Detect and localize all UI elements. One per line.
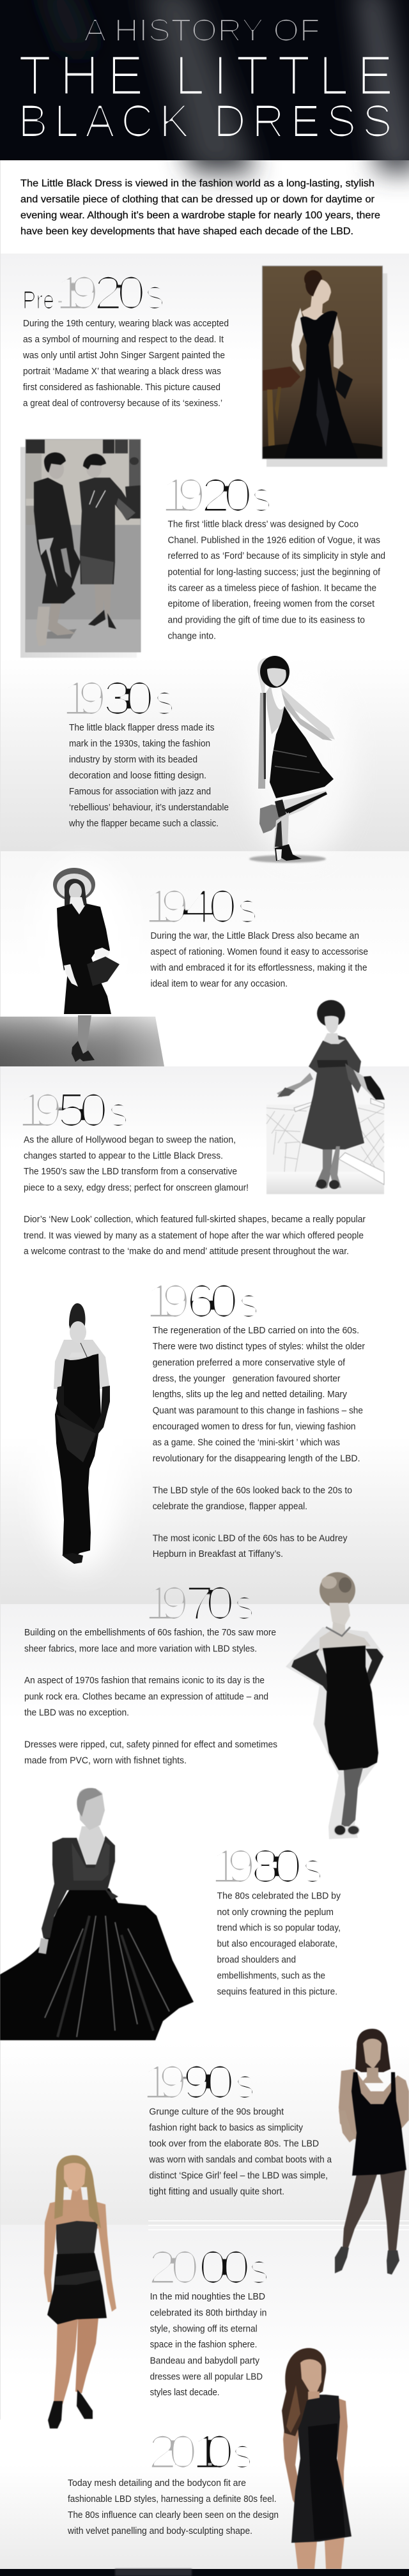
text: 1950s: As the allure of Hollywood began to sweep the nation, [24, 1135, 236, 1145]
text: 1920s [167, 519, 385, 641]
heading: Pre-1920s: s [144, 271, 166, 319]
image: Audrey Hepburn in long black dress [35, 1303, 125, 1571]
text: 1960s: celebrate the grandiose, flapper appeal. [153, 1501, 307, 1512]
panel: 1950s [17, 1000, 385, 1257]
text: 1940s: aspect of rationing. Women found it easy to accessorise [151, 947, 368, 957]
text: 1960s: The regeneration of the LBD carried on into the 60s. [153, 1326, 359, 1336]
title line: A History Of: A HISTORY OF [84, 13, 320, 48]
text: 1980s [217, 1891, 341, 1997]
text: 1990s [148, 2107, 332, 2197]
text: 1930s: ‘rebellious’ behaviour, it’s understandable [69, 803, 229, 813]
image: Madame X painting [262, 266, 387, 467]
text: 1970s: Building on the embellishments of 60s fashion, the 70s saw more [24, 1628, 276, 1638]
heading: 1980s: s [302, 1844, 323, 1892]
heading: 1940s [144, 880, 258, 933]
heading: 1970s: 70 [185, 1577, 235, 1630]
image: woman in 1950s dress on ship deck [266, 1000, 385, 1194]
text: 1980s: but also encouraged elaborate, [217, 1939, 337, 1950]
image: woman in 1940s suit and hat [35, 862, 131, 1062]
text: 2000s: styles last decade. [150, 2388, 220, 2398]
text: 1930s: why the flapper became such a classic. [68, 819, 219, 829]
heading: 1930s: s [154, 676, 175, 724]
heading: 2010s: 10 [192, 2425, 234, 2478]
heading: 2010s: 20 [148, 2425, 197, 2478]
image: woman in strapless black dress [44, 2155, 116, 2428]
text: 2000s: style, showing off its eternal [150, 2324, 258, 2335]
text: 2010s: with velvet panelling and body-sculpting shape. [67, 2526, 252, 2536]
text: 1960s: There were two distinct types of styles: whilst the older [153, 1342, 365, 1352]
text: pre-1920s: portrait ‘Madame X’ that wearing a black dress was [23, 367, 221, 377]
text: 1990s: fashion right back to basics as simplicity [149, 2123, 304, 2133]
text: 1920s: referred to as ‘Ford’ because of its simplicity in style and [167, 551, 385, 561]
text: pre-1920s: a great deal of controversy because of its ‘sexiness.’ [23, 398, 222, 409]
text: 1960s: encouraged women to dress for fun, viewing fashion [153, 1421, 355, 1432]
text: 2010s [67, 2478, 279, 2536]
heading: 2010s: s [232, 2430, 253, 2478]
text: 1950s: piece to a sexy, edgy dress; perfect for onscreen glamour! [24, 1183, 249, 1193]
heading: 1940s: s [237, 884, 258, 932]
image: woman in modern bodycon dress [282, 2348, 351, 2569]
text: 1920s: its career as a timeless piece of fashion. It became the [167, 584, 376, 594]
heading: 2000s: s [249, 2245, 270, 2293]
heading: 1950s: 19 [17, 1084, 63, 1137]
image: flapper dancer [246, 656, 355, 863]
text: 1960s: as a game. She coined the ‘mini-skirt ’ which was [153, 1437, 340, 1448]
image: woman in sequin and velvet gown [0, 1788, 194, 2040]
heading: 1950s: 50 [57, 1084, 108, 1137]
heading: 1960s [145, 1275, 259, 1328]
heading: Pre-1920s: 19 [55, 266, 99, 319]
heading: 1950s: s [108, 1088, 129, 1136]
heading: Pre-1920s [22, 266, 166, 319]
panel: 1940s [0, 862, 368, 1066]
heading: 1970s: s [234, 1581, 255, 1629]
heading: 1980s: 80 [251, 1840, 302, 1893]
text: 1920s: Chanel. Published in the 1926 edition of Vogue, it was [167, 535, 380, 545]
text: 1950s: changes started to appear to the Little Black Dress. [24, 1151, 223, 1161]
text: 1990s: was worn with sandals and combat boots with a [148, 2155, 332, 2165]
text: 1960s: Hepburn in Breakfast at Tiffany’s. [153, 1549, 283, 1559]
heading: 1970s: 19 [144, 1577, 189, 1630]
heading: 2000s: 00 [198, 2241, 251, 2294]
text: 1960s: The most iconic LBD of the 60s has to be Audrey [153, 1533, 348, 1543]
text: 1940s: During the war, the Little Black Dress also became an [151, 931, 359, 941]
text: pre-1920s: as a symbol of mourning and respect to the dead. It [23, 335, 224, 345]
text: 1930s: decoration and loose fitting design. [69, 771, 206, 781]
panel: 1920s [20, 439, 385, 658]
heading: 1940s: 19 [144, 880, 189, 933]
text: 1930s: industry by storm with its beaded [69, 755, 197, 765]
text: 1940s [150, 931, 368, 989]
text: 1980s: trend which is so popular today, [217, 1923, 341, 1934]
heading: 1920s [160, 469, 272, 522]
text: 1950s: a welcome contrast to the ‘make do and mend’ attitude present throughout the war. [24, 1246, 349, 1257]
image: punk woman in strapless dress and lace gloves [286, 1572, 383, 1839]
footer band [0, 2569, 409, 2576]
text: 1960s: lengths, slits up the leg and netted detailing. Mary [153, 1390, 348, 1400]
text: 1920s: The first ‘little black dress’ was designed by Coco [167, 519, 359, 529]
heading: 2000s [148, 2241, 270, 2294]
text: 1930s [68, 723, 229, 829]
image: woman in short black slip dress [335, 2029, 409, 2275]
text: 1950s: trend. It was viewed by many as a statement of hope after the war which offered people [24, 1231, 364, 1241]
heading: 1940s: 40 [183, 880, 237, 933]
heading: 1960s: s [238, 1279, 259, 1327]
text: 1960s: generation preferred a more conservative style of [153, 1358, 346, 1368]
text: 1970s: made from PVC, worn with fishnet tights. [24, 1756, 187, 1766]
heading: 1930s: 19 [61, 672, 107, 725]
text: 1960s: dress, the younger generation favoured shorter [153, 1374, 341, 1384]
heading: 1990s: 19 [142, 2056, 187, 2109]
heading: 1970s [144, 1577, 255, 1630]
text: 2000s: In the mid noughties the LBD [150, 2292, 265, 2302]
text: 1980s: not only crowning the peplum [217, 1907, 334, 1918]
heading: 1980s: 19 [210, 1840, 256, 1893]
heading: 1960s: 60 [186, 1275, 238, 1328]
heading: Pre-1920s: Pre [22, 287, 54, 314]
text: 1970s [24, 1628, 277, 1766]
text: 1950s: Dior’s ‘New Look’ collection, which featured full-skirted shapes, became a really popular [24, 1215, 366, 1225]
intro paragraph [20, 178, 380, 237]
panel: 1960s [35, 1275, 365, 1571]
text: 1920s: and providing the gift of time due to its easiness to [167, 615, 365, 625]
image: floor [0, 1017, 164, 1066]
text: 2000s [150, 2292, 266, 2398]
text: 1960s: revolutionary for the disappearing length of the LBD. [153, 1453, 360, 1464]
text: 1940s: ideal item to wear for any occasion. [151, 979, 288, 989]
text: 1930s: Famous for association with jazz and [69, 787, 211, 797]
text: 2010s: The 80s influence can clearly been seen on the design [68, 2510, 279, 2520]
text: 1930s: mark in the 1930s, taking the fashion [69, 739, 210, 749]
text: 1950s: The 1950’s saw the LBD transform from a conservative [24, 1167, 237, 1177]
panel: 1980s [0, 1788, 341, 2040]
text: 1920s: epitome of liberation, freeing women from the corset [167, 599, 374, 609]
text: 1990s: took over from the elaborate 80s. The LBD [149, 2139, 319, 2149]
text: 1980s: The 80s celebrated the LBD by [217, 1891, 341, 1902]
text: 2010s: fashionable LBD styles, harnessing a definite 80s feel. [68, 2494, 276, 2504]
heading: 1990s [142, 2056, 256, 2109]
text: 2010s: Today mesh detailing and the bodycon fit are [68, 2478, 246, 2489]
heading: 1920s: 20 [201, 469, 252, 522]
text: pre-1920s: first considered as fashionable. This picture caused [23, 383, 220, 393]
text: 1960s: The LBD style of the 60s looked back to the 20s to [153, 1485, 352, 1496]
heading: 1930s: 30 [103, 672, 154, 725]
panel: 2010s [67, 2348, 351, 2569]
text: 1980s: broad shoulders and [217, 1955, 296, 1965]
text: 1950s [24, 1135, 366, 1257]
intro paragraph: have been key developments that have shaped each decade of the LBD. [20, 226, 353, 237]
text: 1930s: The little black flapper dress made its [69, 723, 215, 733]
heading: 1920s: 19 [160, 469, 206, 522]
panel: 1930s [61, 656, 355, 863]
text: 1970s: the LBD was no exception. [24, 1708, 129, 1718]
heading: 2000s: 20 [148, 2241, 199, 2294]
text: pre-1920s [22, 319, 229, 409]
text: 1920s: potential for long-lasting success; just the beginning of [167, 567, 381, 577]
panel: 2000s [44, 2155, 270, 2428]
panel: 1990s [142, 2029, 409, 2275]
heading: 1990s: s [235, 2060, 256, 2108]
text: 2000s: celebrated its 80th birthday in [150, 2308, 266, 2318]
heading: 2010s [148, 2425, 253, 2478]
text: 2000s: space in the fashion sphere. [150, 2340, 257, 2350]
heading: Pre-1920s: - [57, 287, 63, 314]
text: 1940s: with and embraced it for its effortlessness, making it the [150, 963, 367, 973]
text: 1960s [153, 1326, 365, 1559]
text: 1990s: tight fitting and usually quite short. [149, 2186, 284, 2197]
heading: 1930s [61, 672, 175, 725]
title line: Black Dress: BLACK DRESS [18, 96, 392, 147]
text: 1990s: Grunge culture of the 90s brought [149, 2107, 284, 2118]
text: 2000s: dresses were all popular LBD [150, 2372, 263, 2382]
text: 1980s: embellishments, such as the [217, 1971, 325, 1981]
text: 1920s: change into. [167, 631, 216, 641]
text: 1970s: punk rock era. Clothes became an expression of attitude – and [24, 1692, 268, 1702]
text: 1970s: sheer fabrics, more lace and more variation with LBD styles. [24, 1644, 257, 1654]
text: pre-1920s: was only until artist John Singer Sargent painted the [22, 351, 225, 361]
heading: 1980s [210, 1840, 323, 1893]
text: 1960s: Quant was paramount to this change in fashions – she [153, 1405, 363, 1416]
text: 1980s: sequins featured in this picture. [217, 1987, 337, 1997]
intro paragraph: and versatile piece of clothing that can be dressed up or down for daytime or [20, 194, 375, 205]
heading: 1960s: 19 [145, 1275, 190, 1328]
text: 1970s: Dresses were ripped, cut, safety pinned for effect and sometimes [24, 1739, 277, 1750]
intro paragraph: The Little Black Dress is viewed in the fashion world as a long-lasting, stylish [20, 178, 374, 189]
text: pre-1920s: During the 19th century, wearing black was accepted [23, 319, 229, 329]
heading: 1990s: 90 [182, 2056, 235, 2109]
panel: pre-1920s [22, 266, 387, 467]
heading: 1920s: s [251, 473, 272, 521]
header banner [0, 0, 409, 172]
text: 1970s: An aspect of 1970s fashion that remains iconic to its day is the [24, 1676, 265, 1686]
heading: Pre-1920s: 20 [93, 266, 146, 319]
text: 2000s: Bandeau and babydoll party [150, 2356, 260, 2366]
intro paragraph: evening wear. Although it’s been a wardrobe staple for nearly 100 years, there [20, 210, 380, 221]
heading: 1950s [17, 1084, 129, 1137]
title line: The Little: THE LITTLE [18, 45, 394, 107]
panel: 1970s [24, 1572, 383, 1839]
image: two women in 1920s dresses [20, 439, 141, 658]
text: 1990s: distinct ‘Spice Girl’ feel – the LBD was simple, [149, 2171, 328, 2181]
